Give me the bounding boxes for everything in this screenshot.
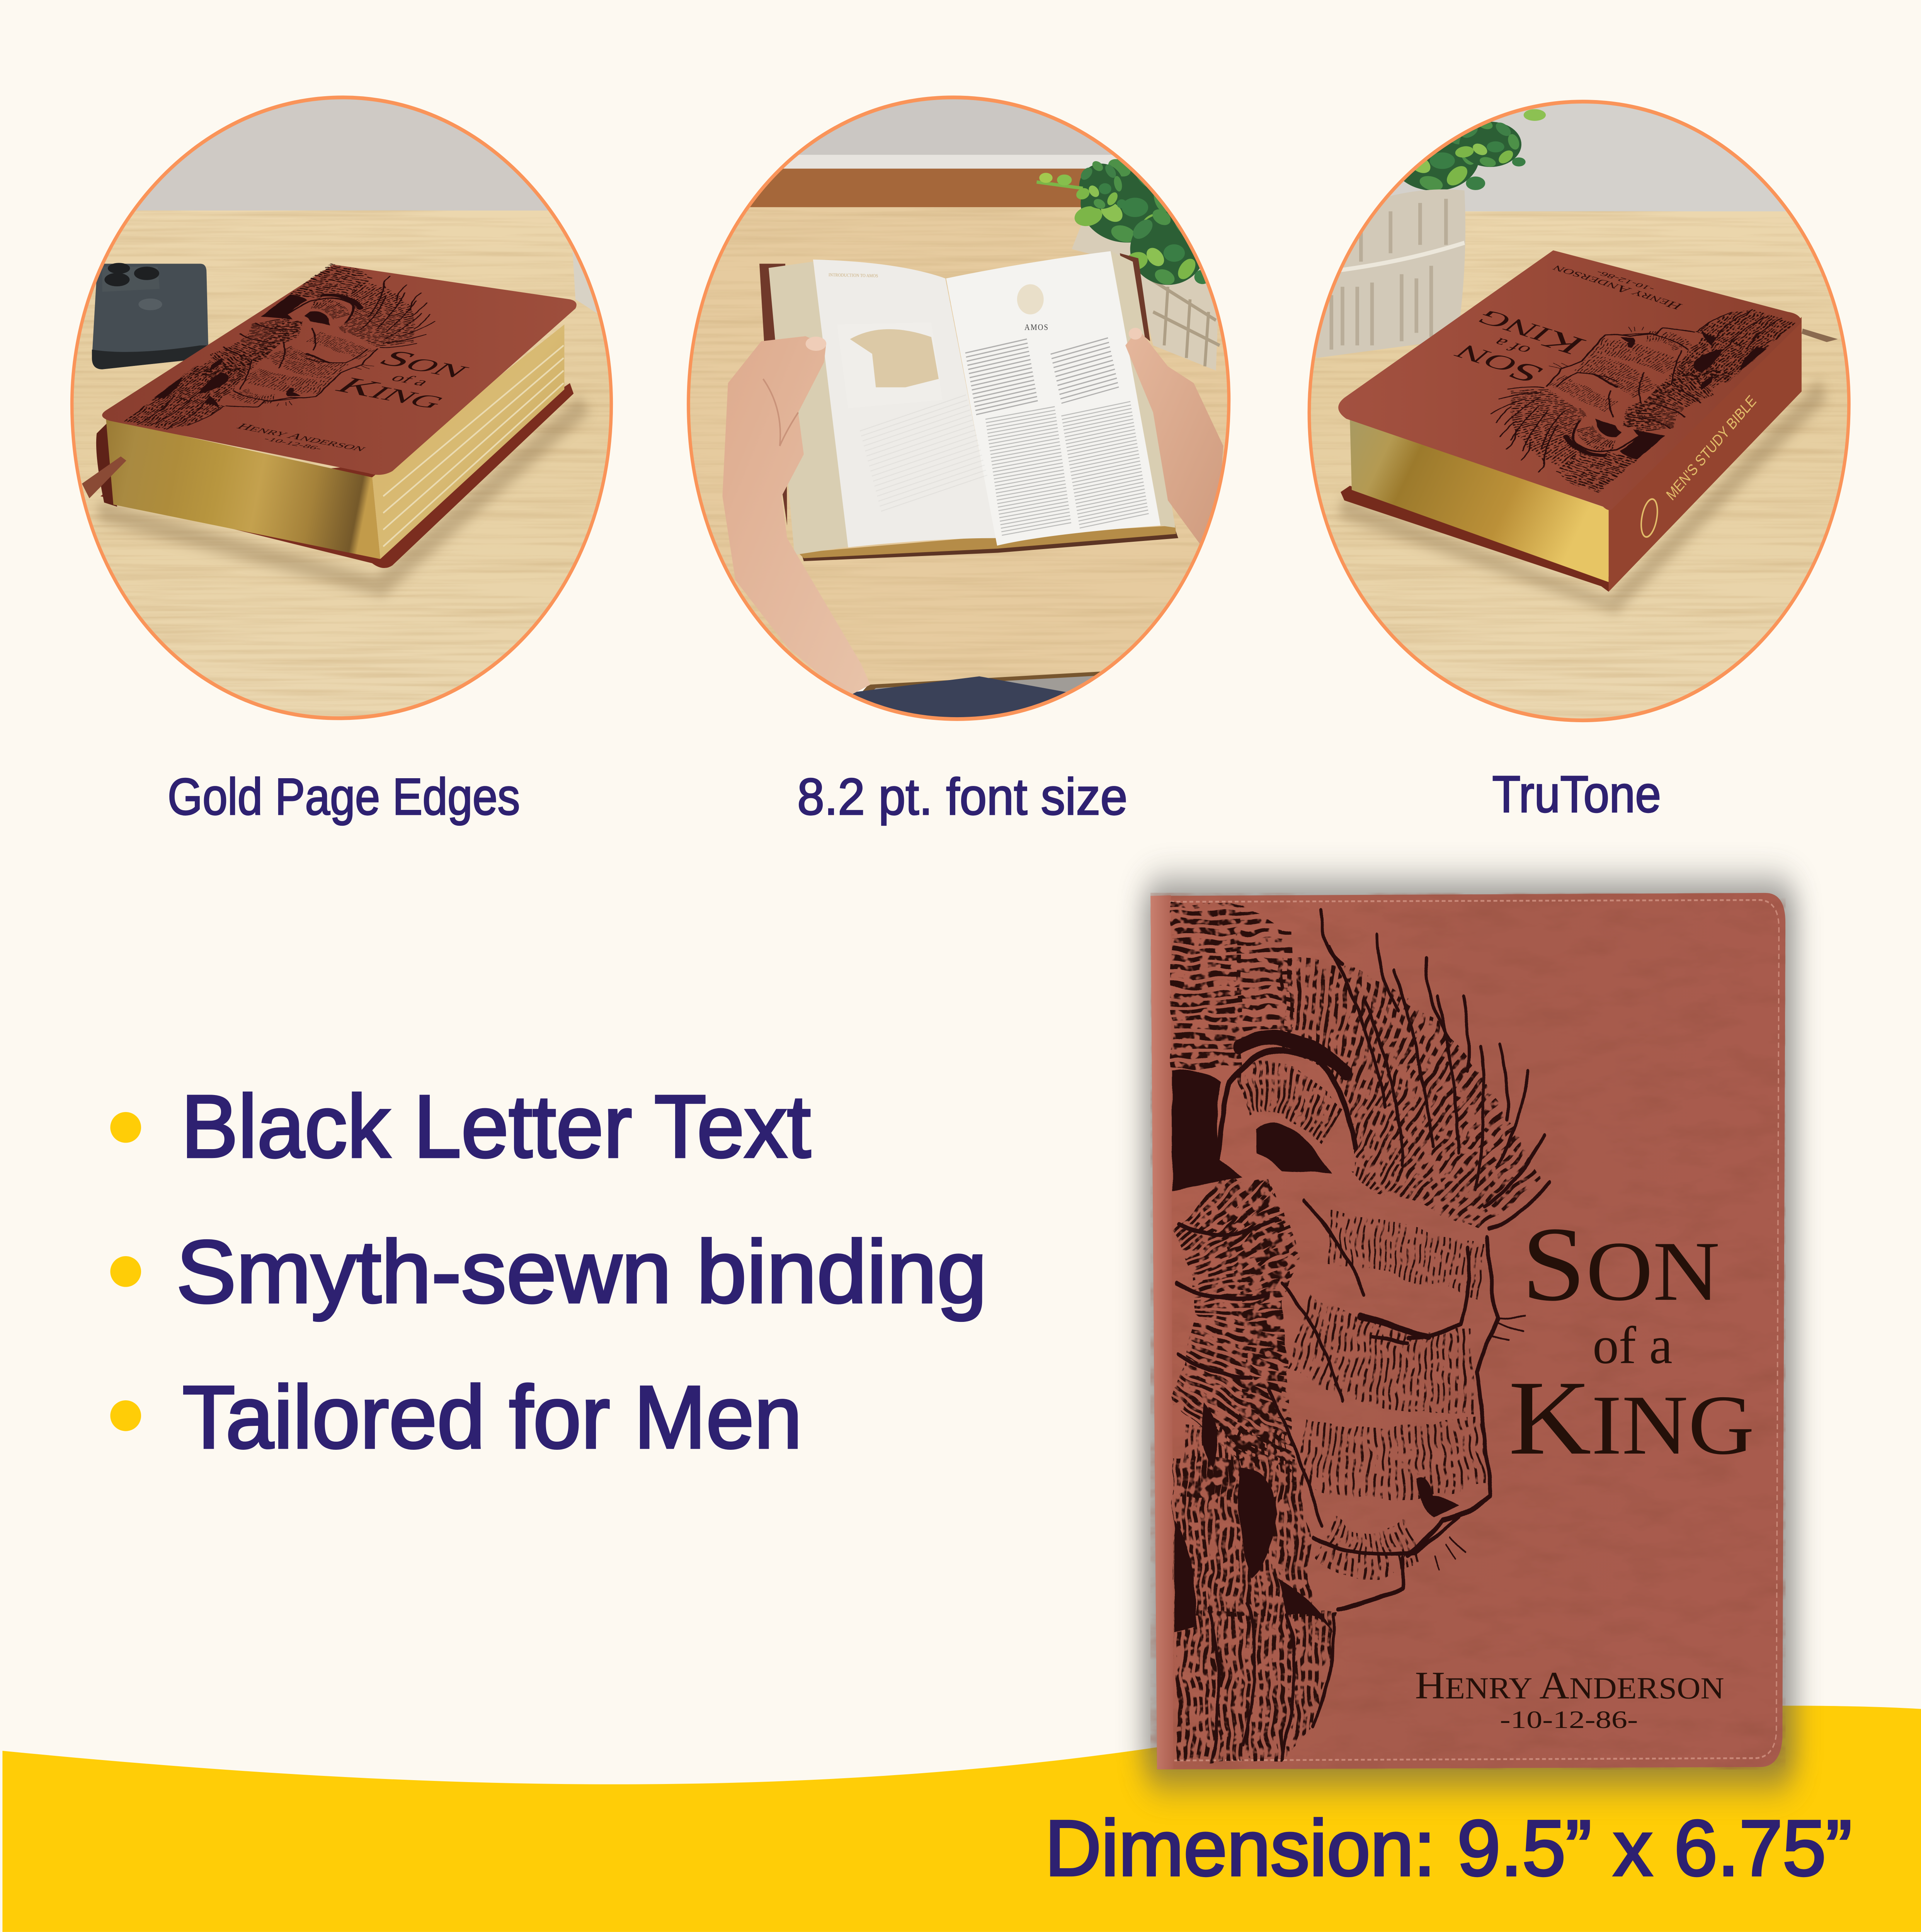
caption: font size: 8.2 pt. font size: [797, 768, 1128, 826]
emblem: [1017, 284, 1044, 315]
ribbon: [1802, 329, 1838, 342]
book cover title: -10-12-86-: [1594, 269, 1657, 292]
bullet 2: [110, 1256, 141, 1287]
leather cover: [1150, 893, 1785, 1769]
plant: [1037, 156, 1211, 287]
panel: open book photo: [676, 77, 1256, 734]
cover title: S ON: [1521, 1205, 1720, 1323]
feature list: [110, 1077, 987, 1467]
book cover title: HENRY ANDERSON: [1548, 263, 1685, 311]
lion illustration on cover: [122, 262, 487, 449]
spine logo: [1639, 497, 1660, 539]
plant pot: [1072, 211, 1220, 371]
spine title: MEN'S STUDY BIBLE: [1663, 392, 1759, 504]
book cover title: SON: [1444, 339, 1552, 388]
feature: smyth-sewn binding: Smyth-sewn binding: [176, 1222, 987, 1321]
left hand and arm: [722, 336, 870, 697]
book cover title: HENRY ANDERSON: [234, 422, 370, 453]
photo frame: [688, 97, 1229, 719]
large book cover: [1144, 881, 1795, 1786]
caption: TruTone: TruTone: [1492, 765, 1661, 823]
book cover title: of a: [1489, 335, 1535, 357]
cover title: K ING: [1509, 1359, 1754, 1477]
book shadow: [99, 396, 590, 597]
chapter title: AMOS: [1024, 323, 1049, 332]
bullet 1: [110, 1112, 141, 1143]
shirt: [846, 676, 1072, 734]
book: closed, spine visible: [1338, 250, 1838, 592]
icon: smartphone: [92, 263, 208, 369]
cover title: of a: [1593, 1316, 1673, 1375]
book cover title: KING: [328, 373, 456, 413]
photo frame: [1309, 102, 1849, 720]
lion illustration on cover: [1441, 276, 1797, 495]
cover title: [1415, 1205, 1754, 1734]
plant: [1345, 109, 1546, 231]
book: open with pages: [759, 251, 1178, 561]
photo frame: [72, 97, 611, 718]
caption: gold page edges: Gold Page Edges: [168, 768, 520, 826]
cover title: -10-12-86-: [1500, 1706, 1638, 1734]
book cover title: [1429, 254, 1692, 401]
bullet 3: [110, 1400, 141, 1431]
map on left page: [837, 322, 943, 408]
book cover title: [227, 338, 493, 460]
introduction heading: INTRODUCTION TO AMOS: [829, 272, 878, 279]
dimension label: Dimension: 9.5” x 6.75”: [1045, 1804, 1852, 1892]
book cover title: KING: [1465, 305, 1594, 359]
book: closed, gold edges: [82, 262, 577, 568]
spine strip: [1150, 895, 1173, 1769]
stitching: [1170, 900, 1779, 1760]
right hand: [1125, 328, 1223, 551]
panel: TruTone photo: [1295, 77, 1874, 735]
book cover title: of a: [386, 372, 433, 388]
text columns: [913, 345, 1114, 530]
lion illustration: [1170, 893, 1550, 1756]
book cover title: -10-12-86-: [262, 436, 324, 451]
cover title: H ENRY A NDERSON: [1415, 1664, 1724, 1707]
panel: gold page edges photo: [70, 95, 613, 720]
cover shadow: [1144, 881, 1795, 1786]
yellow wave footer: [2, 1706, 1921, 1932]
book shadow: [1339, 379, 1827, 614]
plant pot: [1309, 189, 1465, 358]
book cover title: SON: [370, 346, 480, 383]
feature: tailored for men: Tailored for Men: [182, 1367, 802, 1467]
feature: black letter text: Black Letter Text: [181, 1077, 811, 1176]
